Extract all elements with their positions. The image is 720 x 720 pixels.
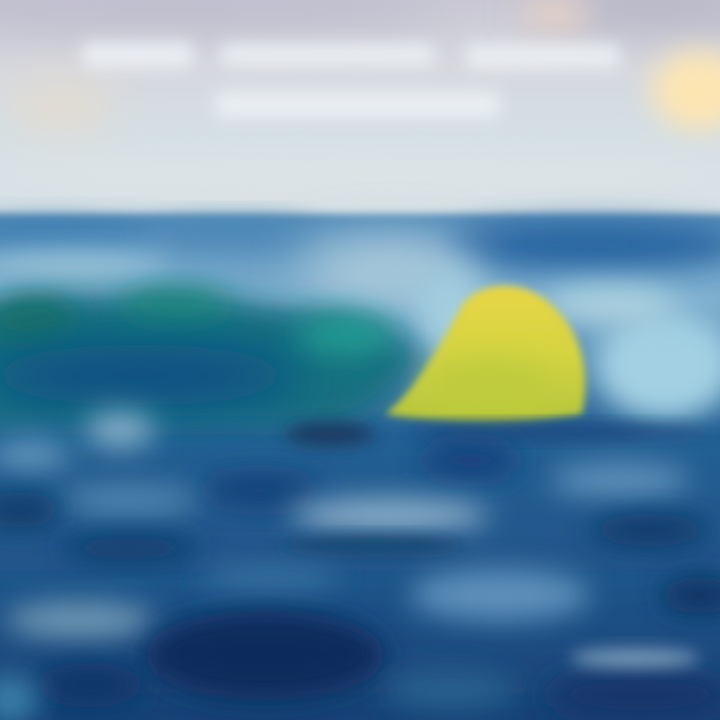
title (illegible, blurred) <box>82 42 620 118</box>
yellow buoy <box>385 285 585 421</box>
sea base <box>0 214 720 720</box>
green wave <box>0 291 418 425</box>
sun glow <box>652 50 720 130</box>
horizon waves <box>0 220 720 420</box>
foreground water <box>0 412 720 720</box>
sky background <box>0 0 720 225</box>
